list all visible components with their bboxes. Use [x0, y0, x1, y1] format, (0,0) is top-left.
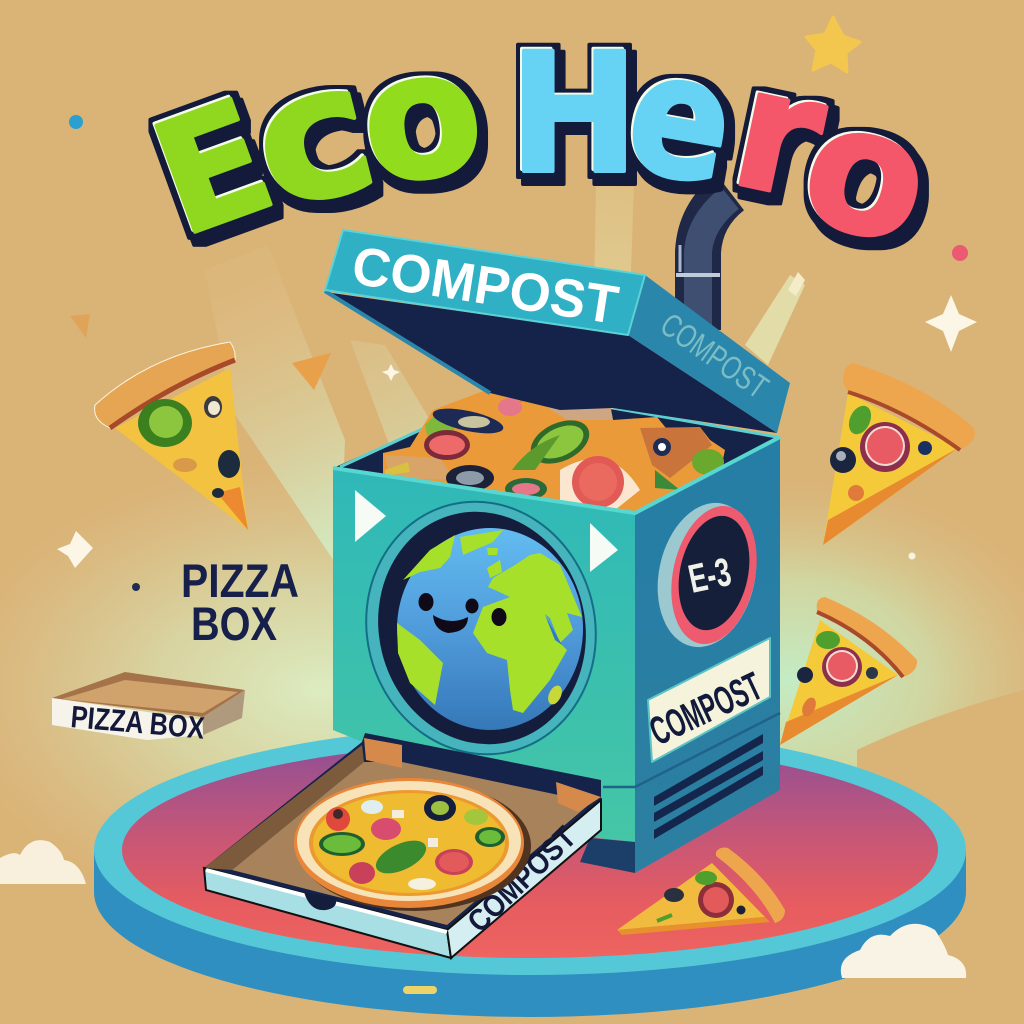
title: Eco Hero	[132, 9, 948, 285]
bin base	[580, 838, 635, 873]
cloud: left	[0, 840, 86, 884]
heading: PIZZA BOX	[181, 554, 299, 650]
title: Eco Hero: r	[718, 29, 840, 238]
lid side label: COMPOST: COMPOST	[654, 305, 775, 406]
lid side panel	[628, 275, 790, 433]
cloud: right	[841, 924, 966, 978]
title: Eco Hero: E	[132, 65, 294, 271]
title: Eco Hero: H	[510, 18, 638, 210]
pizza slice: on platform	[617, 848, 785, 935]
lid label: COMPOST: COMPOST	[348, 236, 622, 336]
earth continents	[397, 530, 582, 713]
compost pile	[383, 365, 725, 520]
gauge badge E-3	[645, 494, 769, 656]
white arrow left	[355, 490, 386, 542]
earth porthole	[340, 477, 622, 779]
title: Eco Hero: c	[233, 21, 394, 250]
title: Eco Hero: e	[614, 14, 747, 224]
label: COMPOST on bin side: COMPOST	[643, 664, 769, 754]
pipe	[676, 192, 730, 330]
bin right face	[635, 437, 780, 873]
bin interior	[333, 392, 780, 513]
bin front face	[333, 468, 635, 842]
box walls	[204, 745, 364, 870]
platform	[94, 725, 966, 1017]
box corner flaps	[364, 738, 402, 768]
lower corner tan mask	[857, 690, 1024, 930]
label: COMPOST on bin side	[643, 638, 770, 762]
pizza slice: top left	[95, 342, 248, 530]
vents	[654, 734, 763, 839]
lid front panel	[325, 230, 645, 335]
rim highlight	[333, 437, 780, 513]
title: Eco Hero: o	[785, 61, 948, 285]
lid underside	[325, 292, 777, 433]
back rim	[340, 393, 777, 467]
compost bin	[333, 365, 780, 873]
heading: PIZZA BOX: BOX	[191, 597, 277, 650]
pizza slice: middle right	[780, 597, 917, 745]
gauge badge E-3: E-3	[685, 550, 735, 602]
box inner back wall	[204, 733, 601, 930]
background light rays	[0, 185, 1024, 930]
icon: gold star	[806, 17, 860, 72]
decorative dots and sparkles	[57, 115, 977, 591]
open lid	[325, 230, 790, 433]
box notch	[304, 892, 336, 910]
white arrow right	[590, 523, 618, 572]
title: Eco Hero: o	[349, 9, 494, 224]
large pizza box	[204, 733, 601, 958]
small box label: PIZZA BOX	[69, 699, 206, 746]
box front side	[204, 868, 451, 958]
earth face	[418, 593, 506, 633]
bin seam	[603, 713, 780, 787]
lid lip	[325, 291, 490, 393]
box floor	[232, 762, 592, 925]
connector on platform edge	[403, 986, 437, 994]
pizza slice: top right	[823, 363, 975, 545]
pizza	[294, 778, 531, 911]
box top edge highlight	[206, 870, 447, 932]
small pizza box	[52, 672, 245, 746]
red sea	[545, 615, 562, 645]
heading: PIZZA BOX: PIZZA	[181, 554, 299, 607]
box side label: COMPOST: COMPOST	[461, 819, 583, 939]
